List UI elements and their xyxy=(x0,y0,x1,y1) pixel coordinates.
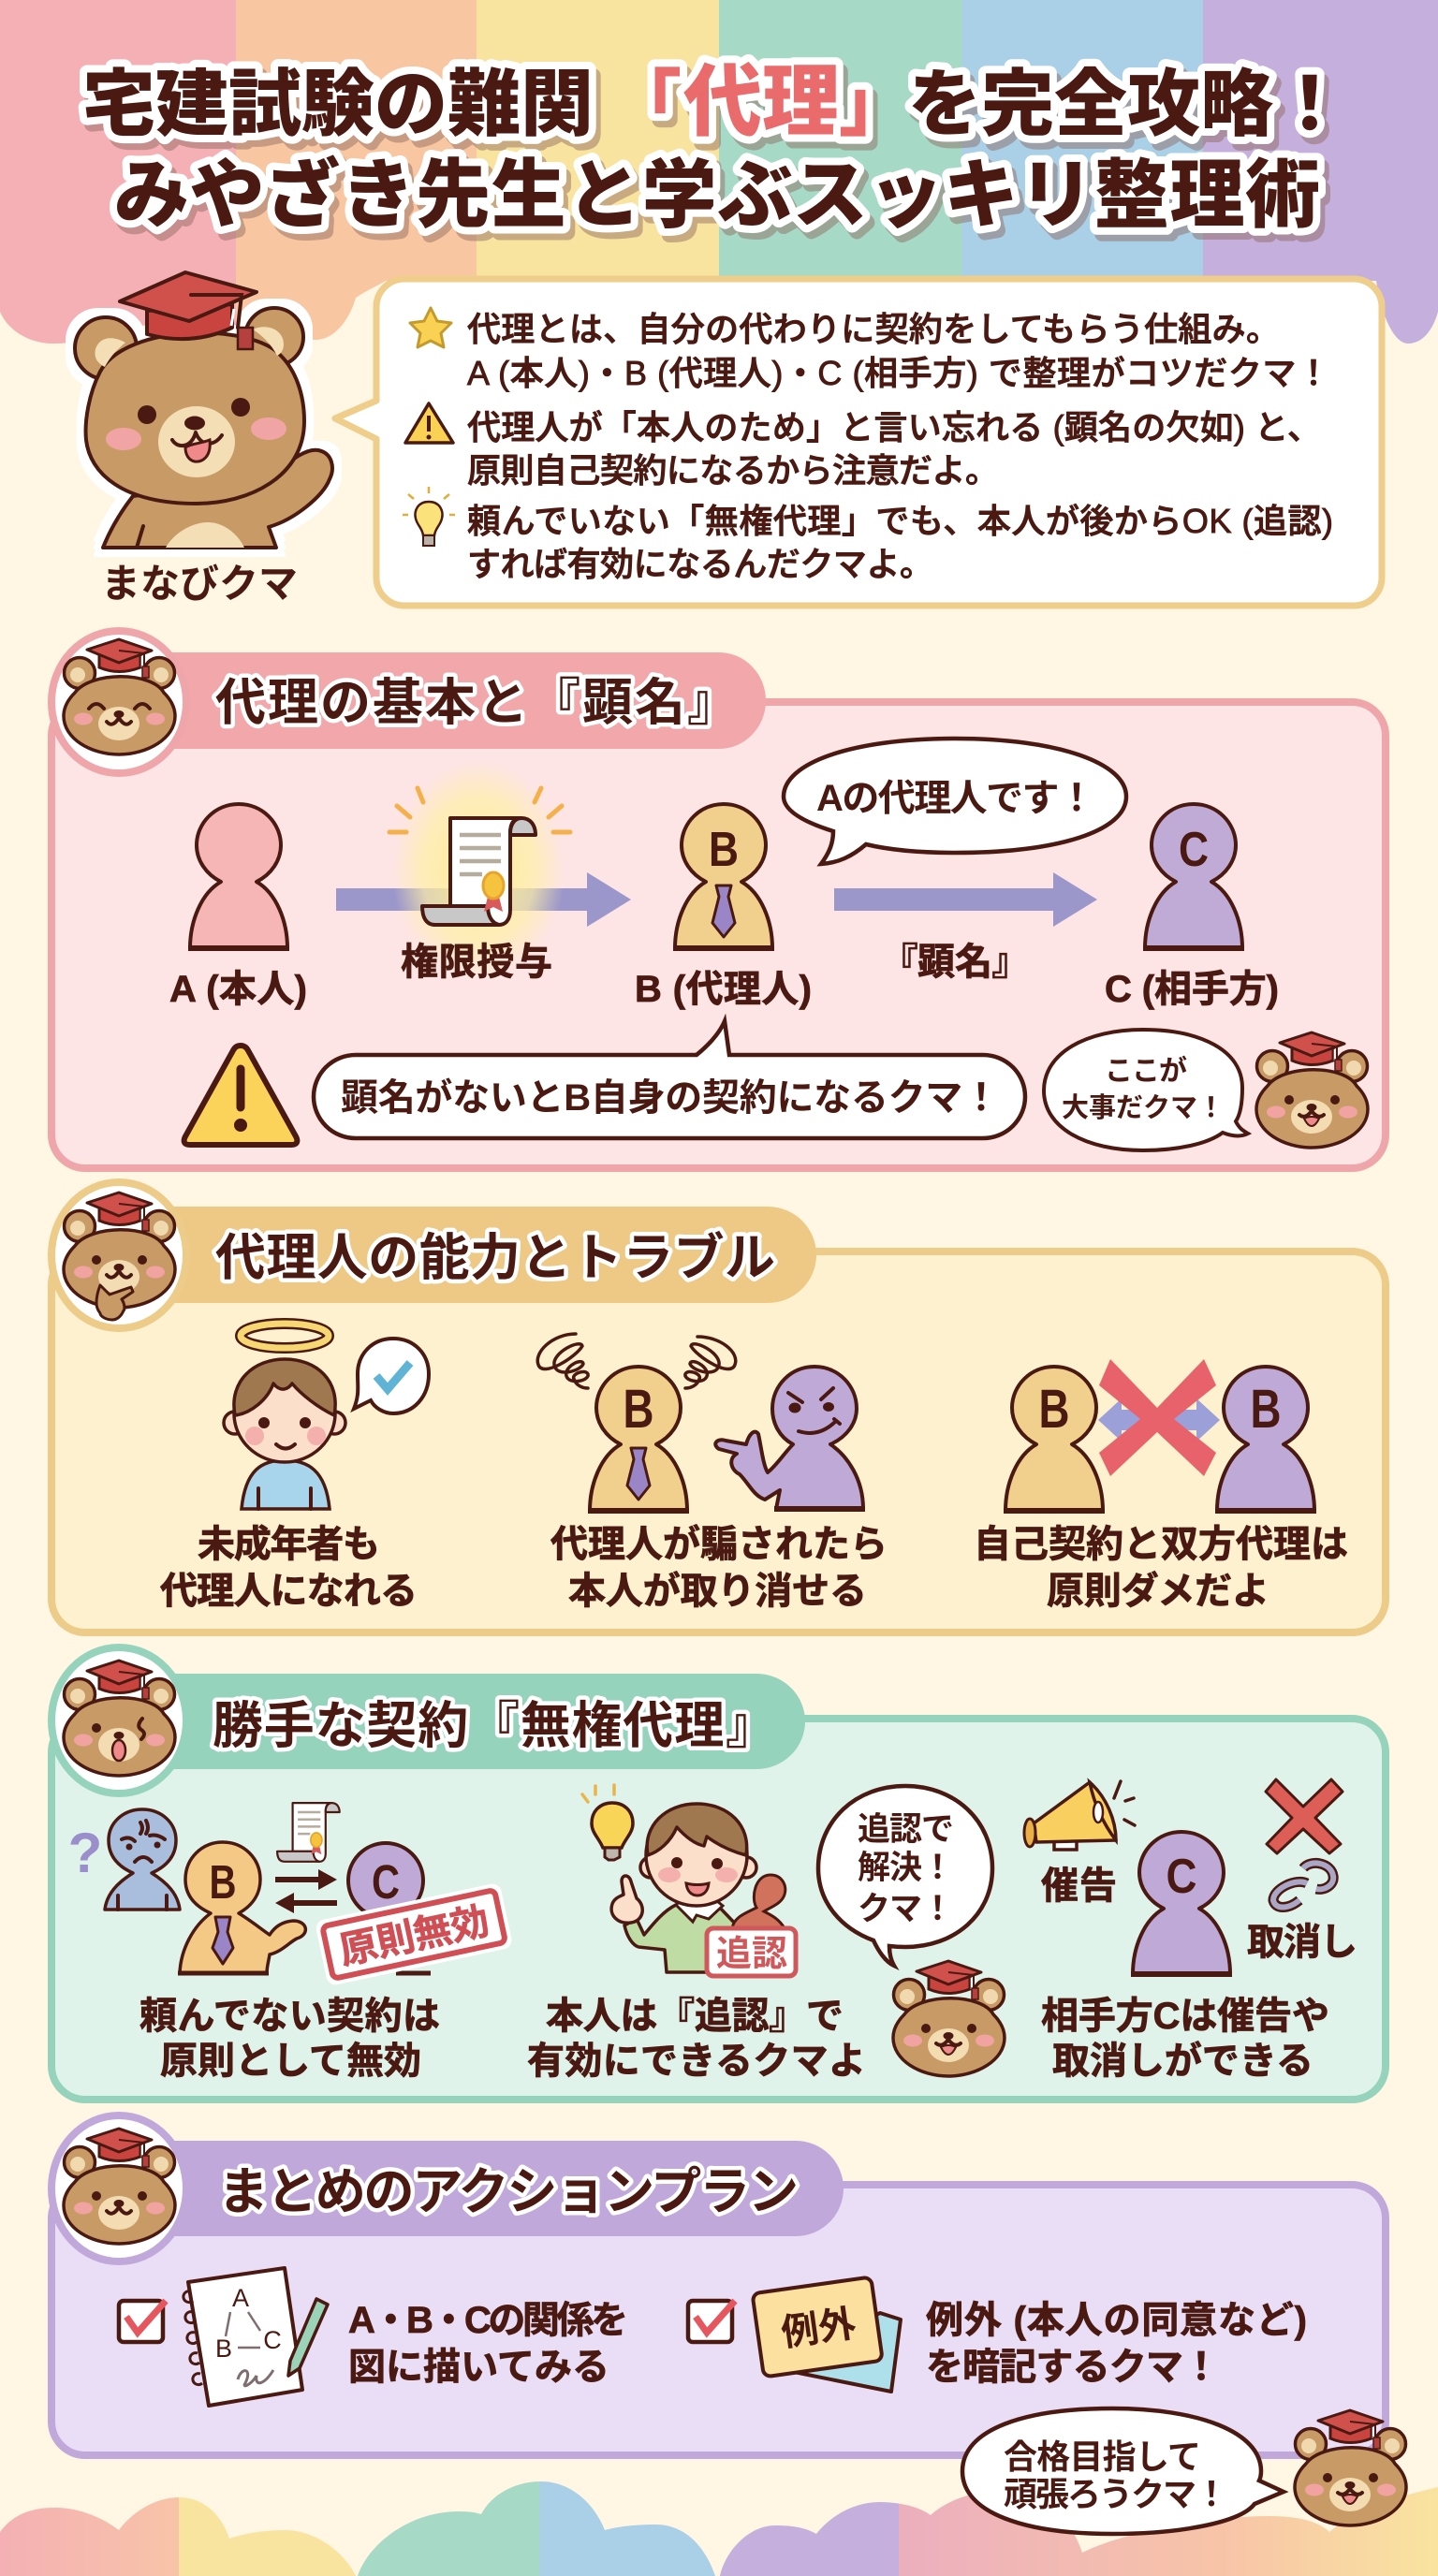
person: principal ratifying xyxy=(611,1804,756,1972)
title: みやざき先生と学ぶスッキリ整理術 xyxy=(114,154,1320,237)
speech bubble: warning xyxy=(314,1021,1025,1138)
panel: section 2 xyxy=(51,1182,1386,1632)
text: draw relation: 図に描いてみる xyxy=(348,2347,609,2388)
intro speech panel xyxy=(335,279,1382,606)
text: point three: 頼んでいない「無権代理」でも、本人が後からOK (追認) xyxy=(467,502,1333,540)
person: counterparty xyxy=(1131,1832,1232,1974)
text: invalid contract xyxy=(139,1996,440,2082)
stamp: invalid: 原則無効 xyxy=(335,1899,492,1972)
text: point one: A (本人)・B (代理人)・C (相手方) で整理がコツだクマ！ xyxy=(467,354,1330,392)
person B: B xyxy=(709,823,739,877)
person: B left: B xyxy=(1039,1379,1069,1440)
bear: solved xyxy=(893,1961,1005,2076)
icon: notebook: C xyxy=(263,2326,282,2354)
section 2 bear badge xyxy=(51,1182,186,1328)
icon: star xyxy=(410,308,451,347)
person: B right: B xyxy=(1251,1379,1281,1440)
text: point two: 原則自己契約になるから注意だよ。 xyxy=(467,451,999,490)
icon: minor child xyxy=(224,1359,345,1509)
text: memorise exceptions: を暗記するクマ！ xyxy=(926,2347,1220,2388)
icon: halo xyxy=(241,1324,329,1348)
person: B left xyxy=(1004,1367,1105,1511)
icon: pencil xyxy=(288,2299,328,2376)
speech bubble: check xyxy=(354,1339,429,1413)
icon: light bulb xyxy=(403,487,455,546)
section 3 bear badge xyxy=(51,1647,186,1793)
label authority grant: 権限授与 xyxy=(401,942,552,983)
mascot: manabi bear xyxy=(75,272,332,548)
panel: section 4 xyxy=(51,2115,1386,2455)
icon: notebook: B xyxy=(215,2334,232,2363)
text: deceived xyxy=(550,1524,888,1612)
bottom rainbow clouds xyxy=(0,2481,1438,2576)
title: 宅建試験の難関 xyxy=(82,63,594,145)
label: demand: 催告 xyxy=(1041,1866,1117,1907)
title: 」 xyxy=(839,63,912,145)
section 4 header pill xyxy=(112,2141,844,2236)
section 1 bear badge xyxy=(51,631,186,773)
label A: A (本人) xyxy=(169,969,307,1010)
panel: section 1 xyxy=(51,631,1386,1168)
section 1 header pill xyxy=(112,652,766,749)
speech bubble: solved: 追認で xyxy=(858,1811,954,1848)
text: self-dealing: 自己契約と双方代理は xyxy=(974,1524,1348,1565)
text: draw relation xyxy=(348,2300,628,2388)
text: point two: 代理人が「本人のため」と言い忘れる (顕名の欠如) と、 xyxy=(467,408,1321,446)
icon: x mark xyxy=(1266,1779,1343,1853)
person: confused B: B xyxy=(624,1379,653,1440)
glow behind scroll xyxy=(392,760,565,981)
icon: notebook xyxy=(183,2268,302,2406)
person: counterparty: C xyxy=(1167,1850,1196,1904)
icon: ratification stamp xyxy=(707,1875,796,1976)
icon: broken chain xyxy=(1273,1863,1333,1908)
rays xyxy=(389,788,570,832)
icon: idea bulb xyxy=(582,1785,633,1860)
speech bubble: warning: 顕名がないとB自身の契約になるクマ！ xyxy=(341,1077,1000,1119)
arrow: double xyxy=(1098,1398,1220,1442)
speech bubble: important xyxy=(1044,1030,1248,1150)
speech bubble: solved xyxy=(818,1786,992,1966)
bear: small happy xyxy=(1256,1032,1368,1148)
icon: ratification stamp: 追認 xyxy=(716,1935,787,1974)
section 2 header pill xyxy=(112,1207,816,1303)
speech bubble: important: 大事だクマ！ xyxy=(1062,1092,1225,1123)
person B xyxy=(673,804,774,948)
text: counterparty rights: 取消しができる xyxy=(1052,2041,1313,2082)
person: worried principal xyxy=(105,1809,180,1910)
text: point three: すれば有効になるんだクマよ。 xyxy=(467,545,933,583)
text: counterparty rights xyxy=(1041,1996,1329,2082)
icon: question mark: ? xyxy=(68,1822,102,1884)
section 3 header pill xyxy=(112,1674,805,1769)
icon: authority scroll xyxy=(422,818,536,925)
title: を完全攻略！ xyxy=(908,63,1346,145)
text: deceived: 代理人が騙されたら xyxy=(550,1524,888,1565)
person C: C xyxy=(1179,823,1209,877)
person: deceiver xyxy=(715,1367,865,1509)
text: invalid contract: 頼んでない契約は xyxy=(139,1996,440,2037)
speech bubble: important: ここが xyxy=(1105,1055,1187,1087)
arrow: B to C xyxy=(834,872,1097,927)
text: ratification: 本人は『追認』で xyxy=(546,1996,844,2037)
text: memorise exceptions: 例外 (本人の同意など) xyxy=(926,2300,1307,2341)
label B: B (代理人) xyxy=(635,969,812,1010)
person: unauthorized agent xyxy=(178,1842,305,1973)
icon: dizzy spirals xyxy=(537,1334,736,1388)
icon: notebook: A xyxy=(232,2284,249,2312)
person: confused B xyxy=(588,1367,689,1511)
title: 代理 xyxy=(683,58,841,146)
label kenmei: 『顕名』 xyxy=(899,942,1011,983)
speech bubble: solved: 解決！ xyxy=(858,1850,954,1886)
title xyxy=(82,58,1346,237)
text: minor xyxy=(160,1524,418,1612)
text: minor: 代理人になれる xyxy=(160,1571,418,1612)
person: counterparty C: C xyxy=(372,1855,400,1909)
checkbox 2 xyxy=(688,2301,735,2342)
speech bubble: solved: クマ！ xyxy=(858,1891,954,1927)
text: self-dealing: 原則ダメだよ xyxy=(1047,1571,1269,1612)
speech bubble: encouragement: 合格目指して xyxy=(1004,2437,1201,2476)
text: point one xyxy=(467,310,1330,392)
panel: section 3 xyxy=(51,1647,1386,2100)
section 4 bear badge xyxy=(51,2115,186,2261)
label: cancel: 取消し xyxy=(1247,1922,1357,1963)
person A xyxy=(188,804,289,948)
text: memorise exceptions xyxy=(926,2300,1307,2388)
icon: exception cards: 例外 xyxy=(779,2303,858,2354)
text: ratification xyxy=(527,1996,866,2082)
bear: encouragement xyxy=(1295,2410,1406,2525)
person: B right xyxy=(1215,1367,1316,1511)
icon: exception cards xyxy=(752,2277,901,2392)
section 4 heading: まとめのアクションプラン xyxy=(218,2164,799,2220)
icon: small scroll xyxy=(277,1803,340,1862)
top rainbow cloud band xyxy=(0,0,1438,344)
icon: megaphone xyxy=(1024,1781,1135,1850)
text: point two xyxy=(467,408,1321,490)
title: 「 xyxy=(609,63,682,145)
section 3 heading: 勝手な契約『無権代理』 xyxy=(213,1698,776,1754)
icon: warning xyxy=(405,403,453,443)
speech bubble: agent: Aの代理人です！ xyxy=(816,778,1095,819)
label C: C (相手方) xyxy=(1105,969,1279,1010)
text: counterparty rights: 相手方Cは催告や xyxy=(1041,1996,1329,2037)
arrows between B and C xyxy=(275,1869,337,1913)
person: unauthorized agent: B xyxy=(210,1855,236,1909)
text: self-dealing xyxy=(974,1524,1348,1612)
icon: warning triangle xyxy=(184,1046,297,1145)
arrow: A to B xyxy=(336,872,631,927)
stamp: invalid xyxy=(319,1887,509,1982)
icon: red cross xyxy=(1099,1359,1216,1476)
speech bubble: agent xyxy=(784,739,1126,864)
person C xyxy=(1143,804,1244,948)
speech bubble: encouragement: 頑張ろうクマ！ xyxy=(1004,2475,1228,2513)
text: point three xyxy=(467,502,1333,583)
text: draw relation: A・B・Cの関係を xyxy=(348,2300,628,2341)
text: point one: 代理とは、自分の代わりに契約をしてもらう仕組み。 xyxy=(467,310,1280,348)
text: invalid contract: 原則として無効 xyxy=(160,2041,421,2082)
mascot name: まなびクマ xyxy=(101,562,298,606)
checkbox 1 xyxy=(119,2301,166,2342)
person: counterparty C xyxy=(348,1843,431,1973)
section 2 heading: 代理人の能力とトラブル xyxy=(215,1230,775,1286)
text: minor: 未成年者も xyxy=(198,1524,380,1565)
speech bubble: encouragement xyxy=(962,2408,1284,2534)
section 1 heading: 代理の基本と『顕名』 xyxy=(215,675,738,731)
text: deceived: 本人が取り消せる xyxy=(568,1571,867,1612)
text: ratification: 有効にできるクマよ xyxy=(527,2041,866,2082)
